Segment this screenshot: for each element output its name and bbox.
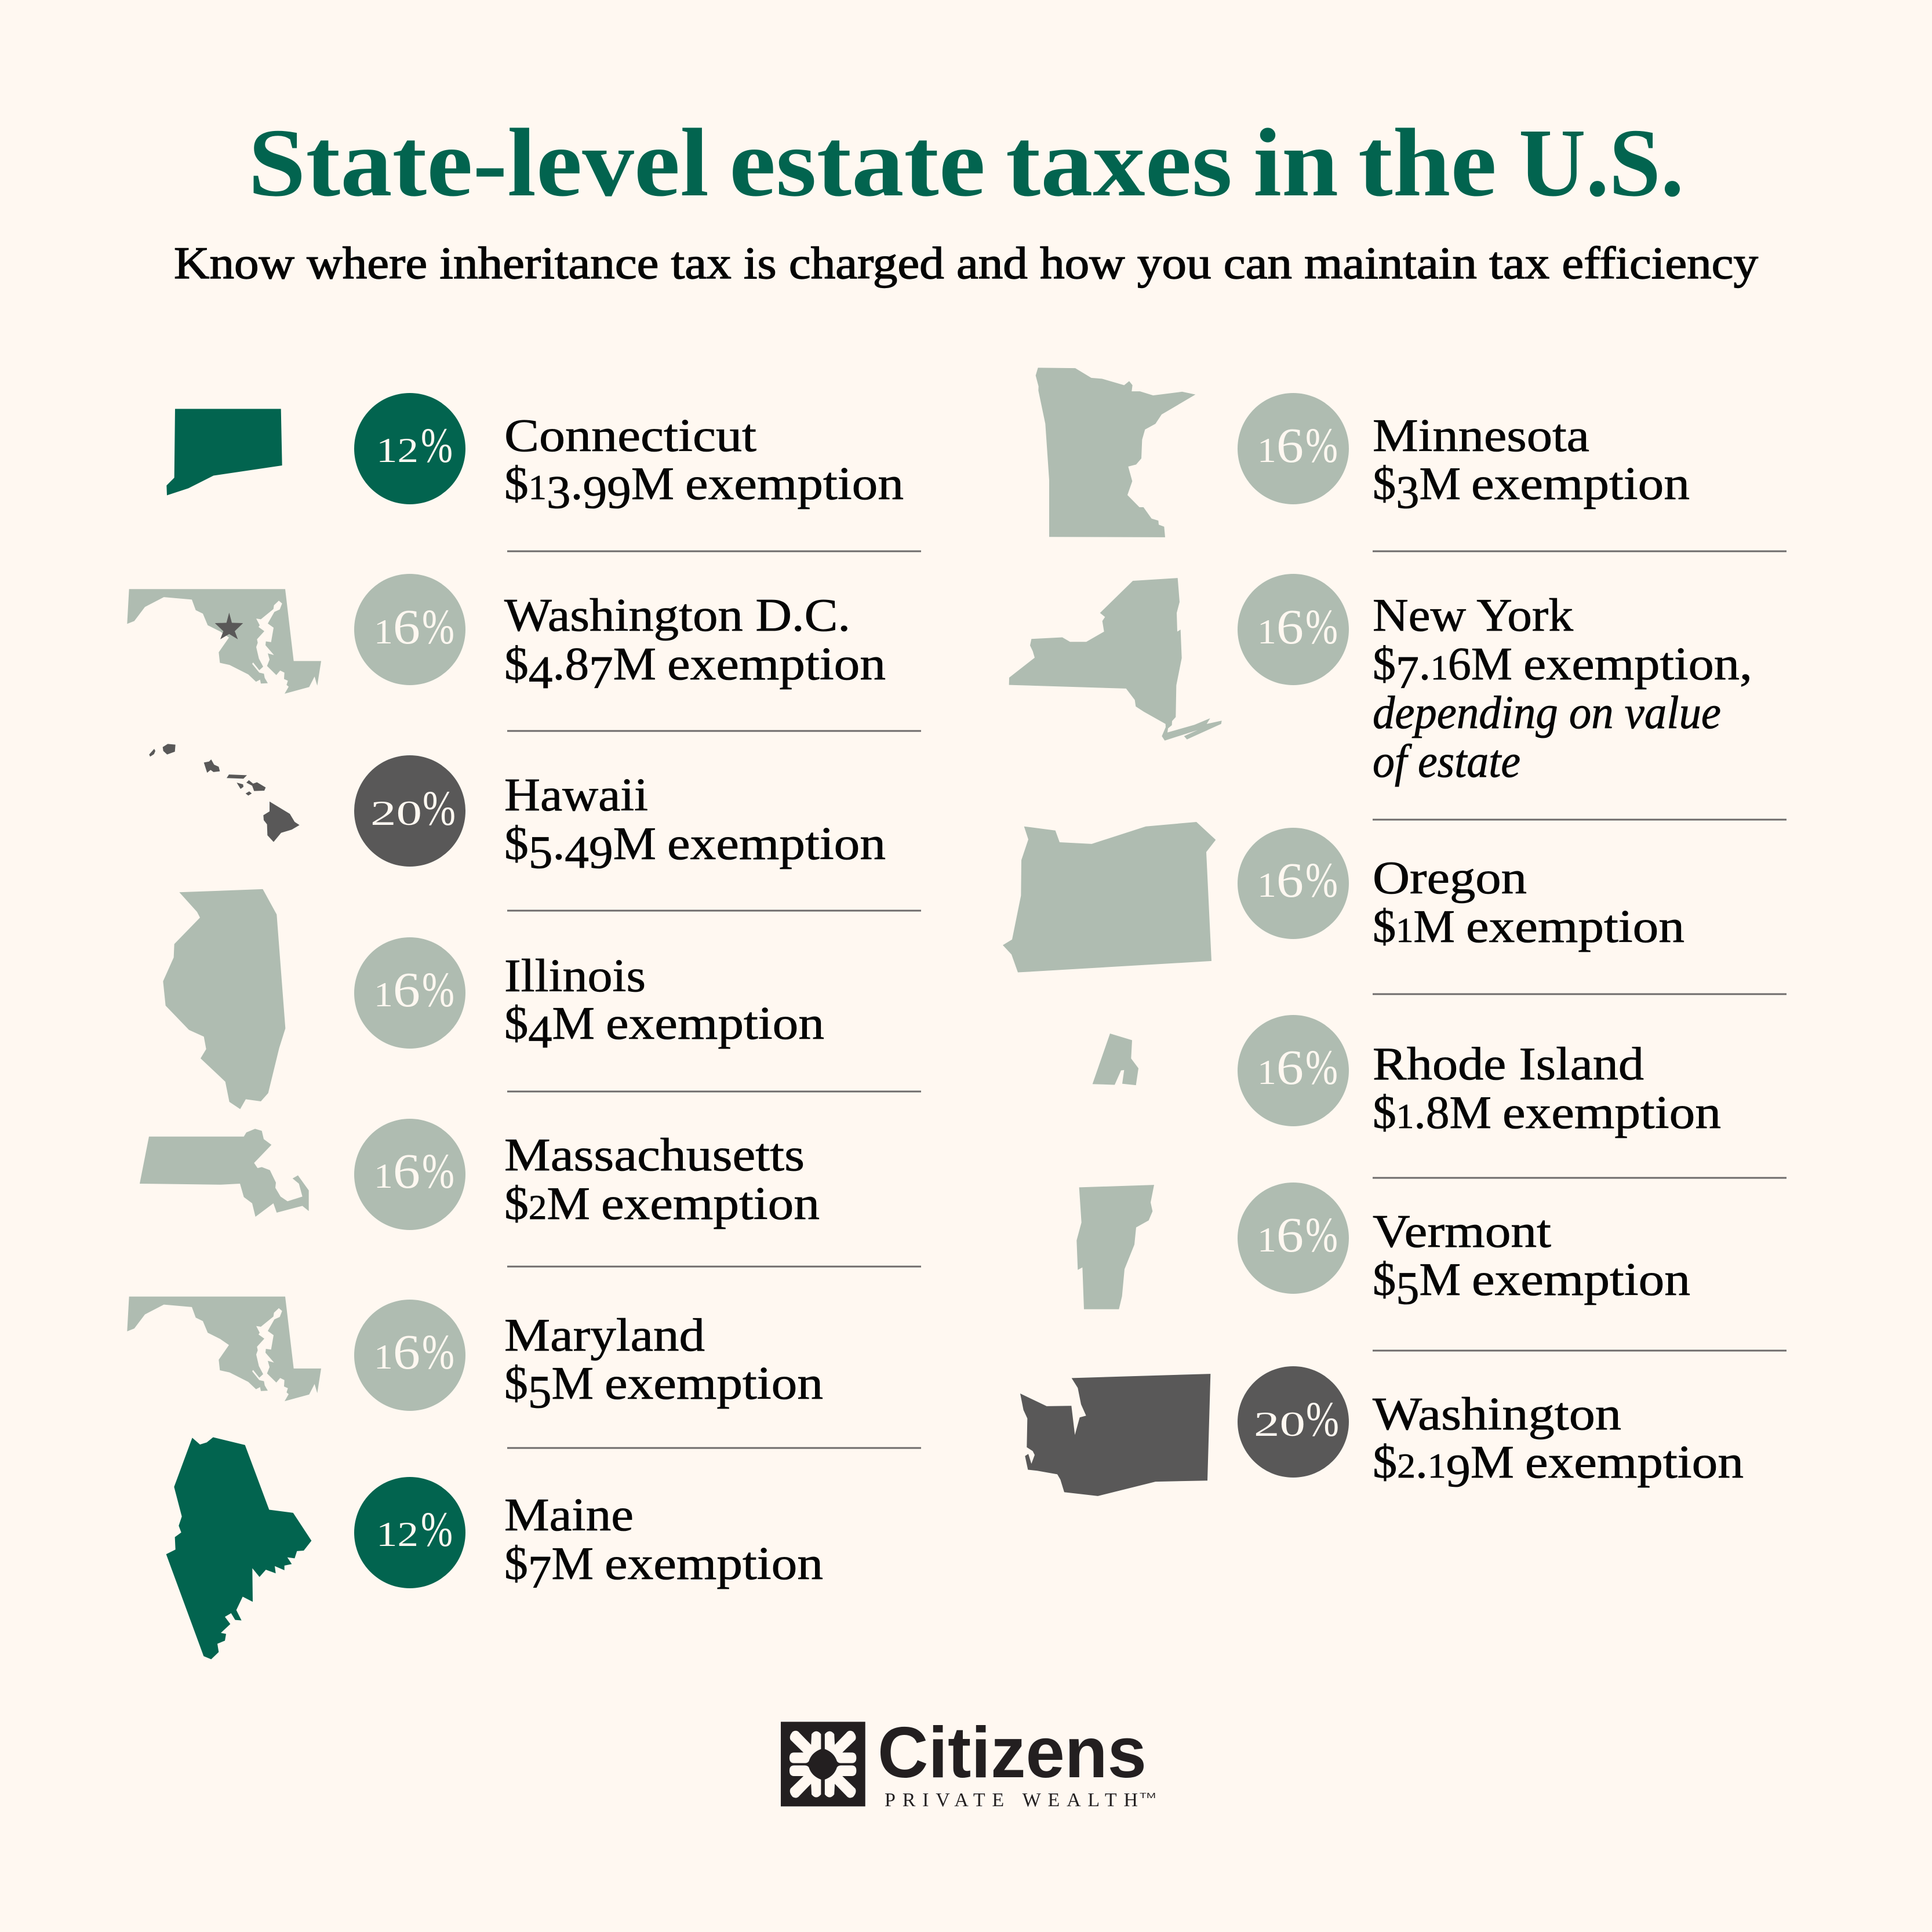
exemption: exemption — [1502, 1087, 1721, 1138]
rate badge: 16% — [1238, 574, 1349, 685]
row: Oregon — [1238, 828, 1684, 952]
map: New York — [1009, 578, 1222, 741]
exemption — [504, 1358, 823, 1418]
rate badge: 16% — [354, 1119, 465, 1230]
exemption: $3M — [1373, 459, 1461, 518]
exemption — [504, 459, 904, 518]
rate badge: 20%: 20 — [1254, 1405, 1305, 1443]
exemption — [504, 1178, 820, 1229]
title: taxes — [1006, 109, 1232, 217]
rate badge: 12%: 12 — [376, 1515, 419, 1553]
logo: Citizens Private Wealth — [781, 1713, 1156, 1811]
rate badge: 16% — [1238, 828, 1349, 939]
rate badge: 16%: 16 — [374, 599, 420, 654]
row: Hawaii — [354, 755, 886, 878]
rate badge: 16%: 16 — [1257, 599, 1304, 654]
title: in — [1253, 109, 1338, 217]
exemption: exemption — [685, 459, 904, 510]
exemption: $5.49M — [504, 818, 656, 878]
rate badge: 16%: % — [422, 599, 454, 654]
title: U.S. — [1519, 109, 1684, 217]
row: Illinois — [354, 937, 824, 1058]
exemption — [504, 1538, 823, 1598]
rate badge: 16%: % — [1305, 599, 1338, 654]
rate badge: 16%: 16 — [1257, 852, 1304, 908]
row: Washington — [1238, 1366, 1744, 1497]
rate badge: 20%: 20 — [370, 794, 422, 832]
exemption: exemption — [1466, 901, 1684, 952]
rate badge: 20%: % — [1306, 1391, 1339, 1447]
state label: Maryland — [504, 1310, 705, 1361]
exemption: $1M — [1373, 901, 1455, 952]
map: Massachusetts — [140, 1129, 309, 1217]
exemption: exemption — [1472, 1254, 1690, 1305]
row: Maryland — [354, 1300, 823, 1418]
rate badge: 16%: 16 — [374, 1143, 420, 1199]
state label: Rhode Island — [1373, 1039, 1644, 1090]
row: Washington D.C. — [354, 574, 886, 698]
map: Hawaii — [149, 744, 300, 842]
rate badge: 16%: % — [422, 1143, 454, 1199]
rate badge: 16% — [354, 937, 465, 1049]
state label: Washington D.C. — [504, 590, 850, 641]
map: Oregon — [1003, 822, 1216, 973]
exemption: $5M — [504, 1358, 594, 1418]
exemption: $4M — [504, 998, 595, 1058]
row: Vermont — [1238, 1183, 1690, 1314]
rate badge: 16% — [354, 1300, 465, 1411]
rate badge: 12%: % — [421, 417, 453, 473]
subtitle: Know where inheritance tax is charged and how you can maintain tax efficiency — [174, 238, 1758, 288]
exemption — [1373, 1437, 1744, 1497]
exemption — [504, 639, 886, 698]
row: Minnesota — [1238, 393, 1690, 518]
logo tagline: PRIVATE WEALTH — [885, 1789, 1138, 1811]
rate badge: 16%: 16 — [1257, 1207, 1304, 1262]
title: the — [1358, 109, 1497, 217]
row: New York — [1238, 574, 1752, 787]
exemption: $7.16M — [1373, 639, 1512, 698]
rate badge: 16% — [1238, 393, 1349, 504]
map: Connecticut — [166, 409, 282, 495]
exemption: exemption — [605, 1538, 823, 1589]
rate badge: 16%: % — [1305, 1039, 1338, 1095]
rate badge: 16%: 16 — [1257, 417, 1304, 473]
title: State-level — [248, 109, 709, 217]
rate badge: 12%: % — [421, 1501, 453, 1557]
exemption — [1373, 901, 1684, 952]
rate badge: 16%: 16 — [1257, 1039, 1304, 1095]
exemption note: depending on value — [1373, 687, 1721, 738]
exemption: exemption — [667, 639, 886, 690]
exemption — [504, 998, 824, 1058]
map: Washington D.C. — [127, 589, 321, 694]
exemption — [504, 818, 886, 878]
exemption: $4.87M — [504, 639, 656, 698]
exemption — [1373, 1087, 1721, 1138]
state label: Connecticut — [504, 410, 756, 461]
row: Massachusetts — [354, 1119, 820, 1230]
state label: Maine — [504, 1490, 634, 1541]
exemption: $13.99M — [504, 459, 674, 518]
exemption — [1373, 1254, 1690, 1314]
state label: Vermont — [1373, 1206, 1551, 1257]
rate badge: 16%: 16 — [374, 962, 420, 1017]
exemption: exemption — [601, 1178, 820, 1229]
exemption: $2.19M — [1373, 1437, 1514, 1497]
exemption — [1373, 639, 1752, 698]
map: Vermont — [1076, 1185, 1154, 1309]
rate badge: 12% — [354, 1477, 465, 1588]
exemption: $7M — [504, 1538, 594, 1598]
rate badge: 16%: % — [422, 962, 454, 1017]
exemption: $1.8M — [1373, 1087, 1491, 1138]
exemption: exemption — [667, 818, 886, 869]
state label: Oregon — [1373, 853, 1527, 904]
rate badge: 20% — [1238, 1366, 1349, 1478]
exemption: $2M — [504, 1178, 590, 1229]
exemption: exemption — [606, 998, 824, 1049]
rate badge: 20% — [354, 755, 465, 867]
row: Connecticut — [354, 393, 904, 518]
rate badge: 16% — [1238, 1183, 1349, 1294]
exemption note continued: of estate — [1373, 736, 1520, 787]
rate badge: 16%: % — [422, 1324, 454, 1380]
logo mark — [781, 1722, 865, 1806]
rate badge: 16% — [354, 574, 465, 685]
row: Rhode Island — [1238, 1015, 1721, 1138]
state label: Hawaii — [504, 770, 648, 821]
rate badge: 16%: % — [1305, 1207, 1338, 1262]
map: Minnesota — [1036, 368, 1195, 537]
map: Illinois — [163, 889, 285, 1109]
exemption: exemption — [605, 1358, 823, 1409]
rate badge: 20%: % — [423, 780, 456, 836]
trademark: TM — [1140, 1791, 1156, 1800]
rate badge: 16% — [1238, 1015, 1349, 1126]
rate badge: 12%: 12 — [376, 431, 419, 470]
state label: Massachusetts — [504, 1130, 805, 1181]
logo wordmark: Citizens — [878, 1713, 1147, 1793]
rate badge: 16%: % — [1305, 417, 1338, 473]
rate badge: 12% — [354, 393, 465, 504]
title — [248, 109, 1684, 217]
exemption — [1373, 459, 1690, 518]
row: Maine — [354, 1477, 823, 1598]
rate badge: 16%: 16 — [374, 1324, 420, 1380]
state label: Minnesota — [1373, 410, 1589, 461]
state label: Illinois — [504, 951, 646, 1002]
map: Maryland — [127, 1297, 321, 1401]
state label: Washington — [1373, 1389, 1621, 1440]
map: Maine — [166, 1437, 311, 1660]
map: Washington — [1020, 1374, 1210, 1496]
exemption: exemption — [1525, 1437, 1744, 1488]
title: estate — [729, 109, 985, 217]
exemption: $5M — [1373, 1254, 1461, 1314]
map: Rhode Island — [1093, 1034, 1138, 1085]
exemption: exemption, — [1523, 639, 1752, 690]
exemption: exemption — [1471, 459, 1690, 510]
state label: New York — [1373, 590, 1573, 641]
rate badge: 16%: % — [1305, 852, 1338, 908]
